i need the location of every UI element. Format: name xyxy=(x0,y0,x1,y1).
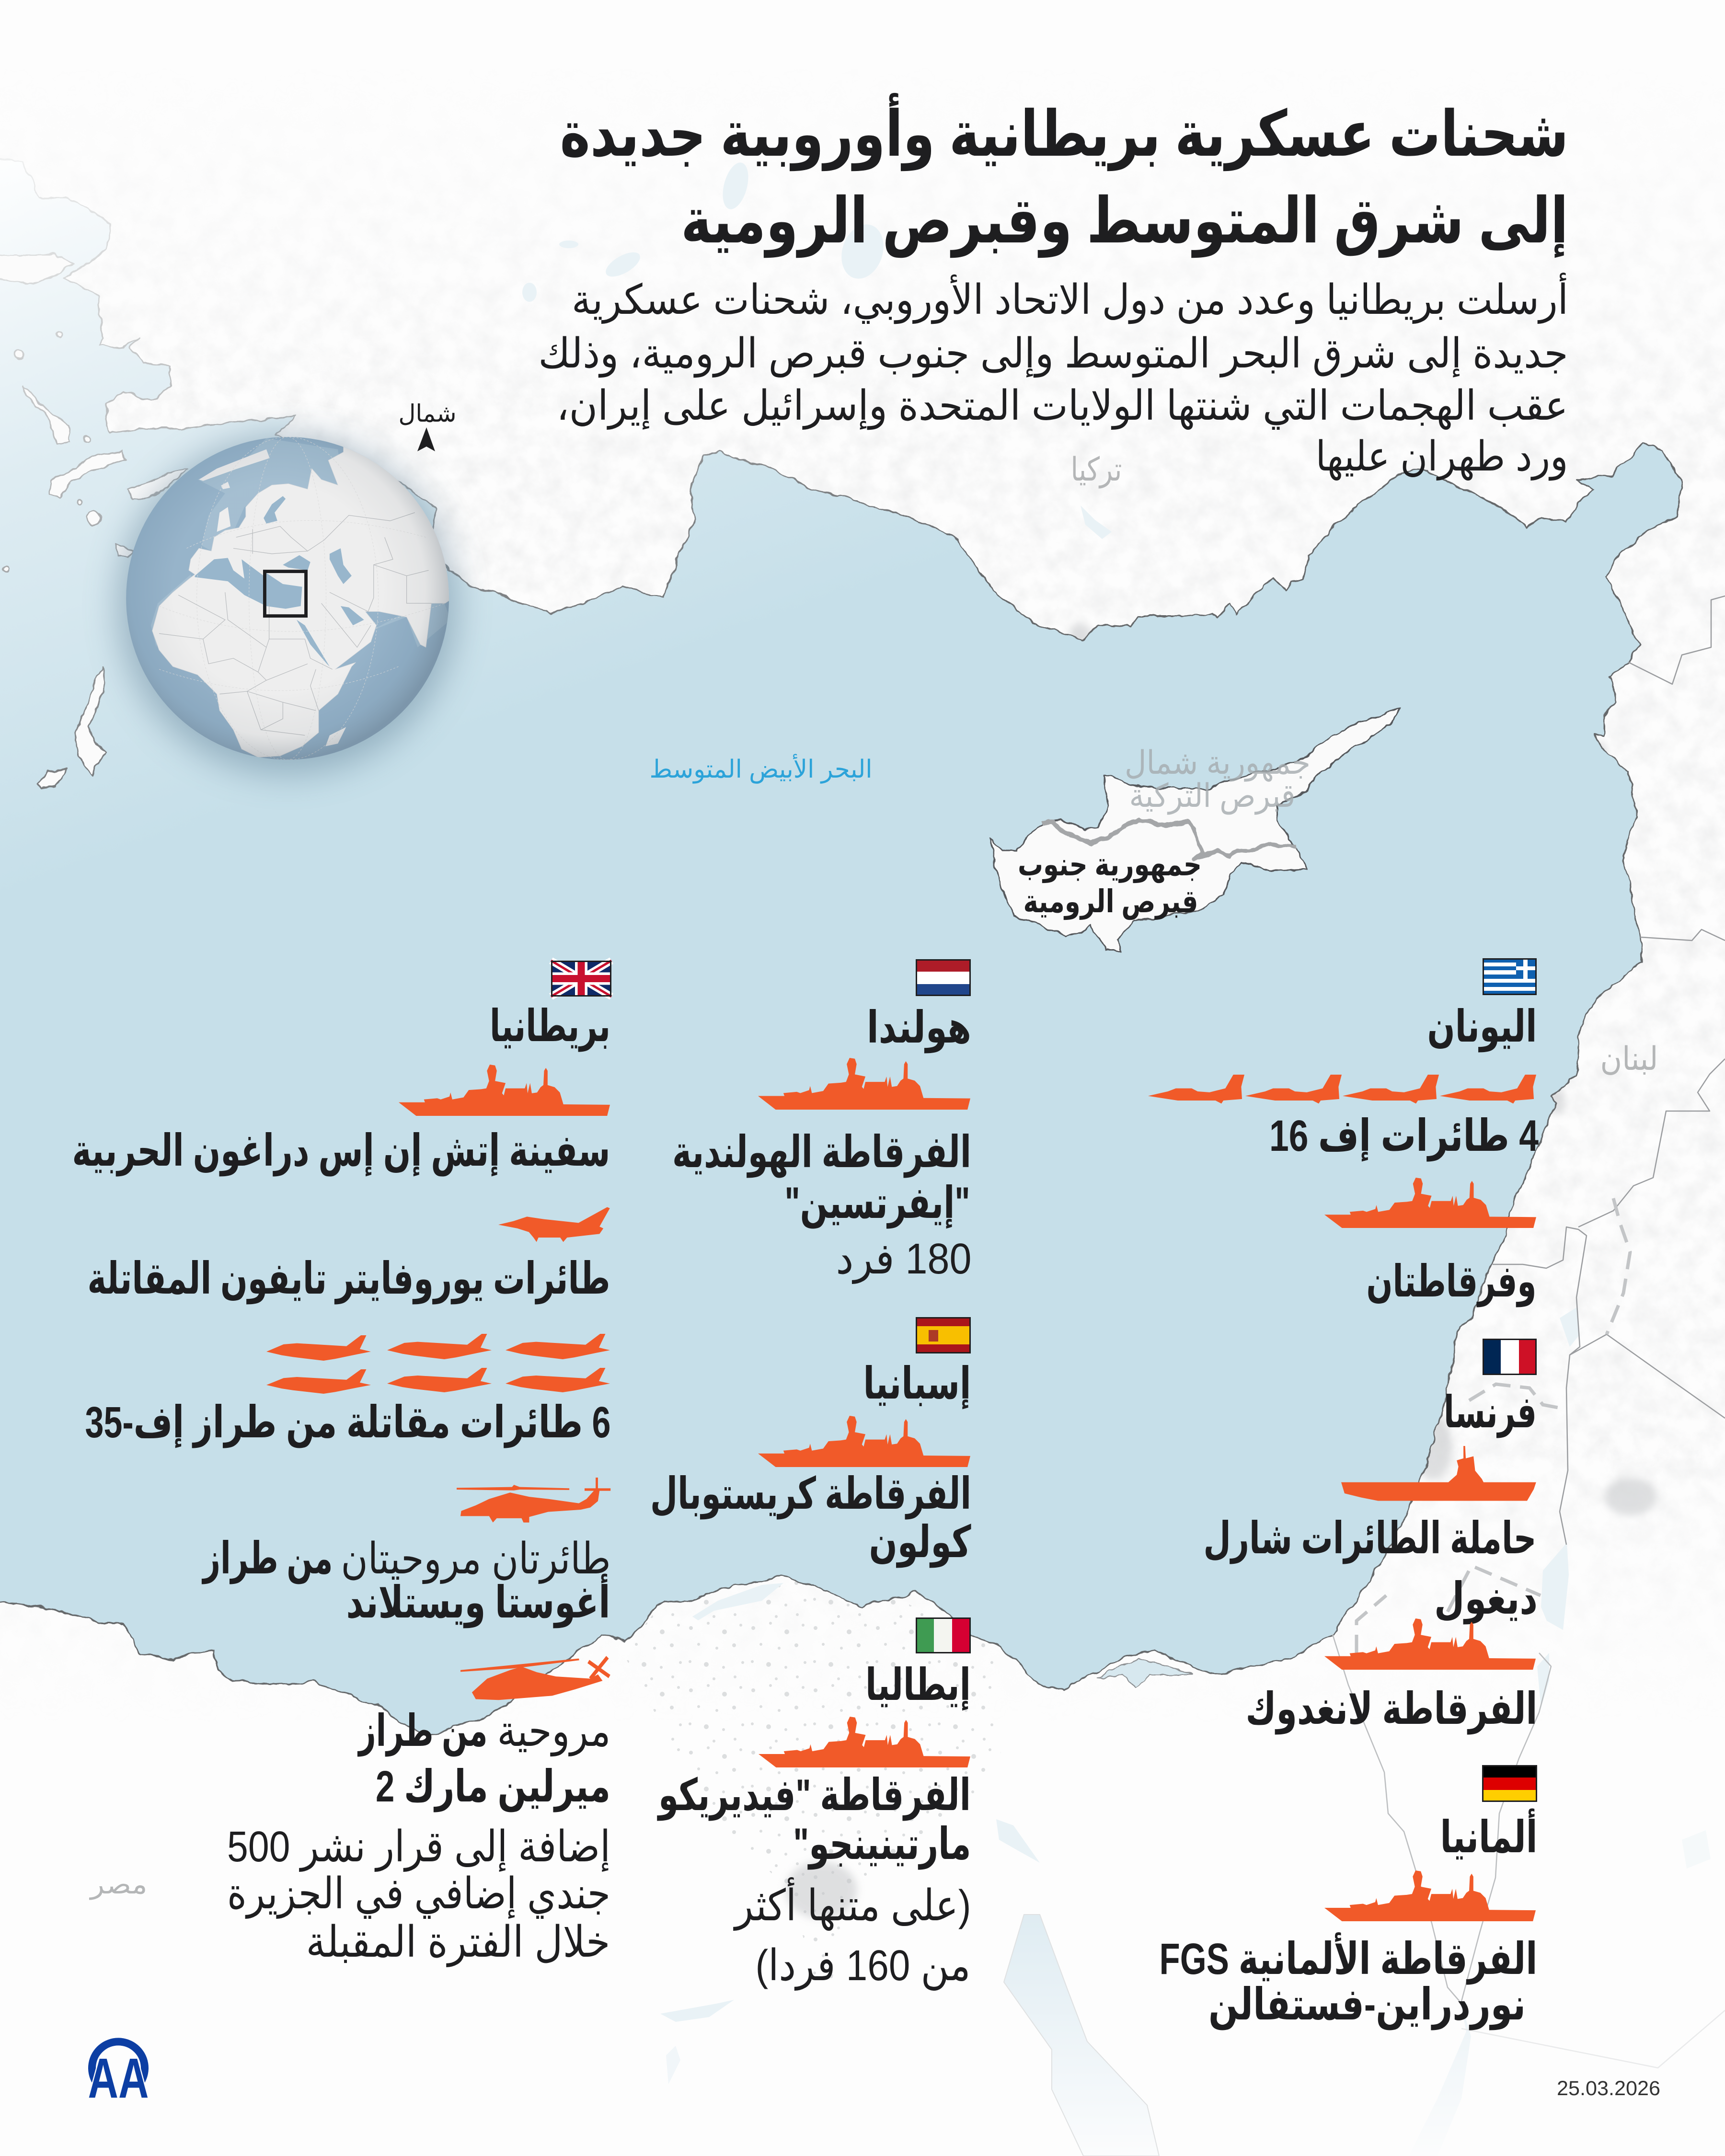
frigate Nordrhein-Westfalen: الفرقاطة الألمانية FGS xyxy=(1160,1932,1537,1985)
logo: Anadolu Agency: AA xyxy=(88,2047,149,2110)
Mediterranean Sea xyxy=(0,159,1682,1735)
label: Northern Cyprus: قبرص التركية xyxy=(1129,778,1296,815)
Eurofighter Typhoon: طائرات يوروفايتر تايفون المقاتلة xyxy=(87,1254,610,1305)
panel: France xyxy=(1204,1339,1538,1735)
label: Northern Cyprus xyxy=(1125,745,1311,815)
500 additional troops: خلال الفترة المقبلة xyxy=(306,1918,610,1967)
country name: بريطانيا xyxy=(490,1002,610,1052)
label: Republic of Cyprus xyxy=(1018,847,1202,920)
six F-35: 6 طائرات مقاتلة من طراز إف-35 xyxy=(85,1398,610,1448)
intro paragraph: عقب الهجمات التي شنتها الولايات المتحدة وإسرائيل على إيران، xyxy=(557,383,1568,430)
inland lakes xyxy=(522,160,1711,2084)
flag: Netherlands xyxy=(916,959,971,996)
country borders xyxy=(159,513,431,735)
label: Lebanon: لبنان xyxy=(1600,1041,1658,1077)
label: Northern Cyprus: جمهورية شمال xyxy=(1125,745,1311,782)
frigate Federico Martinengo: مارتينينجو" xyxy=(794,1820,971,1870)
flag: Italy xyxy=(916,1617,970,1653)
500 additional troops: إضافة إلى قرار نشر 500 xyxy=(227,1823,610,1872)
date: 25.03.2026 xyxy=(1557,2077,1660,2100)
Charles de Gaulle: ديغول xyxy=(1434,1574,1538,1625)
intro paragraph xyxy=(539,273,1568,481)
icons: six F-35 jets xyxy=(266,1334,610,1394)
flag: France xyxy=(1483,1339,1537,1375)
frigate Nordrhein-Westfalen xyxy=(1160,1932,1537,2030)
place labels xyxy=(89,451,1658,1900)
british isles and madagascar xyxy=(217,507,346,746)
aegean islands xyxy=(0,255,188,788)
icon: warship xyxy=(1324,1870,1536,1921)
globe shading xyxy=(126,437,449,760)
country name: فرنسا xyxy=(1444,1388,1537,1438)
urban areas xyxy=(513,623,1657,1919)
intro paragraph: ورد طهران عليها xyxy=(1316,434,1568,481)
label: Egypt: مصر xyxy=(89,1869,148,1900)
gulf of suez xyxy=(1004,1915,1159,2156)
icon: warship xyxy=(759,1717,970,1767)
gulf of aqaba xyxy=(1409,1998,1471,2156)
panel: Netherlands xyxy=(672,959,972,1284)
500 additional troops xyxy=(227,1823,610,1967)
continental shelf xyxy=(197,438,344,551)
country name: ألمانيا xyxy=(1440,1808,1537,1862)
frigate Evertsen: "إيفرتسين" xyxy=(785,1179,970,1229)
500 additional troops: جندي إضافي في الجزيرة xyxy=(227,1870,610,1919)
Merlin Mk2: مروحية xyxy=(497,1708,610,1757)
eurasia and africa landmass xyxy=(152,424,481,757)
icon: Typhoon jet xyxy=(498,1207,610,1242)
flag: United Kingdom xyxy=(551,961,611,997)
label: Republic of Cyprus: جمهورية جنوب xyxy=(1018,847,1202,883)
Merlin Mk2 xyxy=(357,1707,610,1812)
country name: إيطاليا xyxy=(865,1661,971,1711)
globe shadow xyxy=(117,435,458,775)
icon: warship xyxy=(1324,1178,1536,1228)
label: Republic of Cyprus: قبرص الرومية xyxy=(1024,883,1198,920)
country borders xyxy=(1333,596,1725,2068)
cyprus xyxy=(990,708,1400,952)
flag: Germany xyxy=(1482,1765,1537,1802)
icon: warship xyxy=(399,1065,610,1116)
frigate Nordrhein-Westfalen: نوردراين-فستفالن xyxy=(1208,1980,1526,2030)
icon: attack helicopter xyxy=(457,1478,610,1523)
frigate Federico Martinengo: (على متنها أكثر xyxy=(733,1877,971,1931)
Augusta Westland xyxy=(202,1534,610,1628)
HMS Dragon: سفينة إتش إن إس دراغون الحربية xyxy=(72,1126,610,1177)
Bardawil lagoon xyxy=(1097,1659,1193,1686)
country name: هولندا xyxy=(867,1003,971,1054)
coastlines and sea xyxy=(0,159,1682,1735)
land terrain texture xyxy=(116,334,1725,1514)
cyprus buffer zone xyxy=(1041,820,1296,860)
panel: Germany xyxy=(1160,1765,1537,2030)
frigate Cristobal Colon xyxy=(650,1469,971,1568)
frigate Cristobal Colon: الفرقاطة كريستوبال xyxy=(650,1469,971,1520)
label: Turkey: تركيا xyxy=(1070,451,1122,489)
graticule xyxy=(159,437,445,760)
Charles de Gaulle: حاملة الطائرات شارل xyxy=(1204,1514,1536,1564)
icon: aircraft carrier xyxy=(1341,1446,1536,1501)
panel: Greece xyxy=(1148,958,1539,1307)
flag: Spain xyxy=(916,1317,971,1353)
icon: Merlin helicopter xyxy=(460,1657,610,1700)
country name: إسبانيا xyxy=(863,1359,971,1410)
frigate Federico Martinengo xyxy=(657,1771,971,1991)
Augusta Westland: طائرتان مروحيتان xyxy=(341,1535,610,1584)
panel: Italy xyxy=(657,1617,971,1991)
north label: شمال xyxy=(399,400,456,427)
Augusta Westland: من طراز xyxy=(202,1534,333,1584)
label: Mediterranean Sea: البحر الأبيض المتوسط xyxy=(650,754,872,784)
Merlin Mk2: من طراز xyxy=(357,1707,488,1757)
frigate Languedoc: الفرقاطة لانغدوك xyxy=(1246,1685,1537,1735)
north arrow xyxy=(417,427,435,451)
frigate Evertsen: 180 فرد xyxy=(836,1235,972,1284)
frigate Federico Martinengo: من 160 فردا) xyxy=(755,1942,971,1991)
inland seas xyxy=(195,496,364,666)
icon: warship xyxy=(758,1416,970,1467)
globe locator xyxy=(117,400,481,775)
panel: United Kingdom xyxy=(72,961,611,1967)
frigate Federico Martinengo: الفرقاطة "فيديريكو xyxy=(657,1771,971,1821)
icon: warship xyxy=(1324,1618,1536,1670)
Augusta Westland: أغوستا ويستلاند xyxy=(346,1573,610,1628)
icons: four F-16 jets xyxy=(1148,1075,1536,1103)
two frigates: وفرقاطتان xyxy=(1367,1257,1536,1307)
panel: Spain xyxy=(650,1317,971,1568)
locator square xyxy=(264,572,306,616)
title xyxy=(560,93,1569,258)
intro paragraph: أرسلت بريطانيا وعدد من دول الاتحاد الأوروبي، شحنات عسكرية xyxy=(572,273,1568,324)
Merlin Mk2: ميرلين مارك 2 xyxy=(376,1762,610,1812)
Charles de Gaulle xyxy=(1204,1514,1538,1625)
icon: warship xyxy=(758,1058,970,1110)
intro paragraph: جديدة إلى شرق البحر المتوسط وإلى جنوب قبرص الرومية، وذلك xyxy=(539,331,1568,378)
Nile delta settlements xyxy=(623,1579,1001,2012)
frigate Evertsen: الفرقاطة الهولندية xyxy=(672,1128,971,1178)
globe sphere xyxy=(126,424,481,760)
flag: Greece xyxy=(1483,958,1537,995)
greenland xyxy=(199,449,270,481)
disputed borders xyxy=(1357,1198,1630,1653)
country name: اليونان xyxy=(1427,1002,1537,1053)
frigate Evertsen xyxy=(672,1128,972,1284)
frigate Cristobal Colon: كولون xyxy=(869,1518,971,1568)
four F-16: 4 طائرات إف 16 xyxy=(1269,1112,1539,1162)
